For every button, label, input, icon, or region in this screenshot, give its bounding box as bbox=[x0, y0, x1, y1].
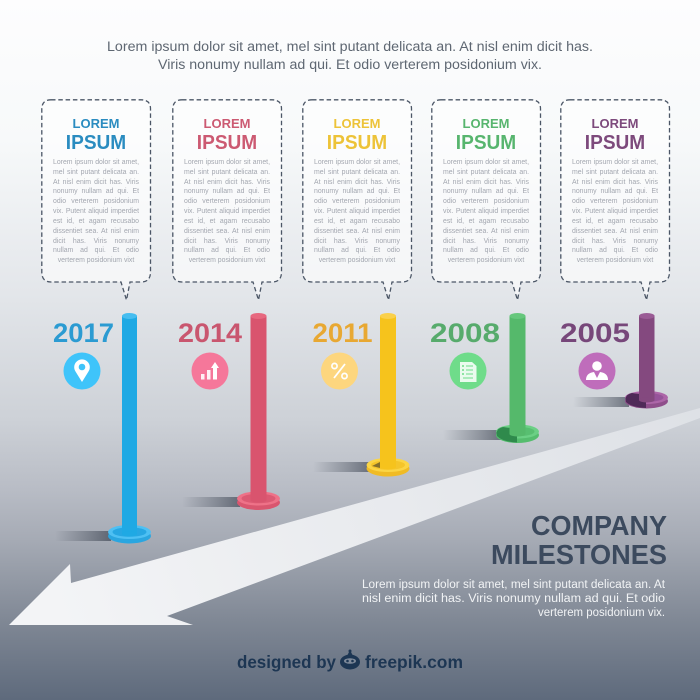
panel: card 3: LOREM bbox=[334, 116, 380, 131]
footer credit bbox=[237, 650, 463, 672]
panel: card 2: est id, et agam recusabo bbox=[184, 218, 270, 225]
panel: card 5: LOREM bbox=[592, 116, 638, 131]
panel: card 2: verterem posidonium vixt bbox=[189, 257, 265, 264]
panel: card 4: mel sint putant delicata an. bbox=[443, 169, 529, 176]
panel: card 2: nonumy nullam ad qui. Et bbox=[184, 188, 270, 195]
panel: card 3: nullam ad qui. Et odio bbox=[314, 247, 400, 254]
icon: location pin bbox=[64, 352, 100, 390]
panel: card 3: vix. Putent aliquid imperdiet bbox=[314, 208, 400, 215]
intro text: Lorem ipsum dolor sit amet, mel sint putant delicata an. At nisl enim dicit has. bbox=[107, 39, 593, 54]
panel: card 1: dissentiet sea. At nisl enim bbox=[53, 228, 139, 235]
panel: card 3: nonumy nullam ad qui. Et bbox=[314, 188, 400, 195]
panel: card 5: At nisl enim dicit has. Viris bbox=[572, 179, 658, 186]
icon: growth bars bbox=[192, 352, 228, 390]
panel: card 5: verterem posidonium vixt bbox=[577, 257, 653, 264]
panel: card 5: dissentiet sea. At nisl enim bbox=[572, 228, 658, 235]
description text: verterem posidonium vix. bbox=[538, 607, 665, 619]
panel: card 5: odio verterem posidonium bbox=[572, 198, 658, 205]
panel: card 4: dissentiet sea. At nisl enim bbox=[443, 228, 529, 235]
panel: card 3: Lorem ipsum dolor sit amet, bbox=[314, 159, 400, 166]
panel: card 2: nullam ad qui. Et odio bbox=[184, 247, 270, 254]
heading: company milestones bbox=[491, 510, 667, 570]
panel: card 3: mel sint putant delicata an. bbox=[314, 169, 400, 176]
panel: card 2 bbox=[172, 99, 282, 300]
description text: nisl enim dicit has. Viris nonumy nullam ad qui. Et odio bbox=[362, 593, 665, 605]
panel: card 3: dissentiet sea. At nisl enim bbox=[314, 228, 400, 235]
panel: card 1: nullam ad qui. Et odio bbox=[53, 247, 139, 254]
panel: card 5: vix. Putent aliquid imperdiet bbox=[572, 208, 658, 215]
heading: company milestones: MILESTONES bbox=[491, 539, 667, 570]
panel: card 5: nonumy nullam ad qui. Et bbox=[572, 188, 658, 195]
panel: card 4: odio verterem posidonium bbox=[443, 198, 529, 205]
panel: card 2: mel sint putant delicata an. bbox=[184, 169, 270, 176]
icon: person bbox=[578, 352, 616, 390]
icon: percent bbox=[321, 352, 358, 390]
panel: card 3: est id, et agam recusabo bbox=[314, 218, 400, 225]
panel: card 3 bbox=[302, 99, 412, 300]
panel: card 1: odio verterem posidonium bbox=[53, 198, 139, 205]
panel: card 1: At nisl enim dicit has. Viris bbox=[53, 179, 139, 186]
panel: card 4: nonumy nullam ad qui. Et bbox=[443, 188, 529, 195]
panel: card 3: At nisl enim dicit has. Viris bbox=[314, 179, 400, 186]
panel: card 5: nullam ad qui. Et odio bbox=[572, 247, 658, 254]
year 2008: 2008 bbox=[430, 318, 500, 348]
panel: card 1: verterem posidonium vixt bbox=[58, 257, 134, 264]
panel: card 2: dicit has. Viris nonumy bbox=[184, 238, 270, 244]
panel: card 4: est id, et agam recusabo bbox=[443, 218, 529, 225]
panel: card 2: vix. Putent aliquid imperdiet bbox=[184, 208, 270, 215]
panel: card 2: IPSUM bbox=[197, 131, 257, 154]
panel: card 2: Lorem ipsum dolor sit amet, bbox=[184, 159, 270, 166]
year 2011: 2011 bbox=[312, 318, 372, 348]
road arrow bbox=[9, 408, 700, 625]
panel: card 1: vix. Putent aliquid imperdiet bbox=[53, 208, 139, 215]
panel: card 5 bbox=[560, 99, 670, 300]
panel: card 2: odio verterem posidonium bbox=[184, 198, 270, 205]
panel: card 5: Lorem ipsum dolor sit amet, bbox=[572, 159, 658, 166]
panel: card 4: IPSUM bbox=[456, 131, 516, 154]
panel: card 2: At nisl enim dicit has. Viris bbox=[184, 179, 270, 186]
panel: card 1 bbox=[41, 99, 152, 300]
panel: card 1: mel sint putant delicata an. bbox=[53, 169, 139, 176]
panel: card 5: est id, et agam recusabo bbox=[572, 218, 658, 225]
year 2017: 2017 bbox=[53, 318, 114, 348]
panel: card 4: At nisl enim dicit has. Viris bbox=[443, 179, 529, 186]
panel: card 1: Lorem ipsum dolor sit amet, bbox=[53, 159, 139, 166]
panel: card 3: dicit has. Viris nonumy bbox=[314, 238, 400, 244]
pillar 2014 bbox=[182, 313, 280, 510]
panel: card 4: LOREM bbox=[463, 116, 509, 131]
panel: card 3: verterem posidonium vixt bbox=[319, 257, 395, 264]
intro text: Viris nonumy nullam ad qui. Et odio verterem posidonium vix. bbox=[158, 57, 542, 72]
panel: card 3: odio verterem posidonium bbox=[314, 198, 400, 205]
panel: card 4: Lorem ipsum dolor sit amet, bbox=[443, 159, 529, 166]
pillar 2005 bbox=[573, 313, 668, 408]
footer credit: designed by bbox=[237, 652, 336, 672]
year 2005: 2005 bbox=[560, 318, 630, 348]
panel: card 5: dicit has. Viris nonumy bbox=[572, 238, 658, 244]
panel: card 4: vix. Putent aliquid imperdiet bbox=[443, 208, 529, 215]
panel: card 5: mel sint putant delicata an. bbox=[572, 169, 658, 176]
footer credit: freepik.com bbox=[365, 652, 463, 672]
pillar 2017 bbox=[55, 313, 151, 544]
panel: card 4: verterem posidonium vixt bbox=[448, 257, 524, 264]
panel: card 1: LOREM bbox=[73, 116, 119, 131]
panel: card 1: dicit has. Viris nonumy bbox=[53, 238, 139, 244]
panel: card 4: dicit has. Viris nonumy bbox=[443, 238, 529, 244]
panel: card 1: nonumy nullam ad qui. Et bbox=[53, 188, 139, 195]
panel: card 4 bbox=[431, 99, 542, 300]
year 2014: 2014 bbox=[178, 318, 242, 348]
panel: card 3: IPSUM bbox=[327, 131, 387, 154]
icon: document bbox=[450, 352, 486, 390]
heading: company milestones: COMPANY bbox=[531, 510, 667, 541]
panel: card 2: LOREM bbox=[204, 116, 250, 131]
description text bbox=[362, 579, 666, 619]
panel: card 4: nullam ad qui. Et odio bbox=[443, 247, 529, 254]
pillar 2008 bbox=[443, 313, 539, 443]
panel: card 2: dissentiet sea. At nisl enim bbox=[184, 228, 270, 235]
panel: card 1: est id, et agam recusabo bbox=[53, 218, 139, 225]
pillar 2011 bbox=[313, 313, 410, 476]
description text: Lorem ipsum dolor sit amet, mel sint putant delicata an. At bbox=[362, 579, 666, 591]
intro text bbox=[107, 39, 593, 72]
panel: card 5: IPSUM bbox=[585, 131, 645, 154]
panel: card 1: IPSUM bbox=[66, 131, 126, 154]
